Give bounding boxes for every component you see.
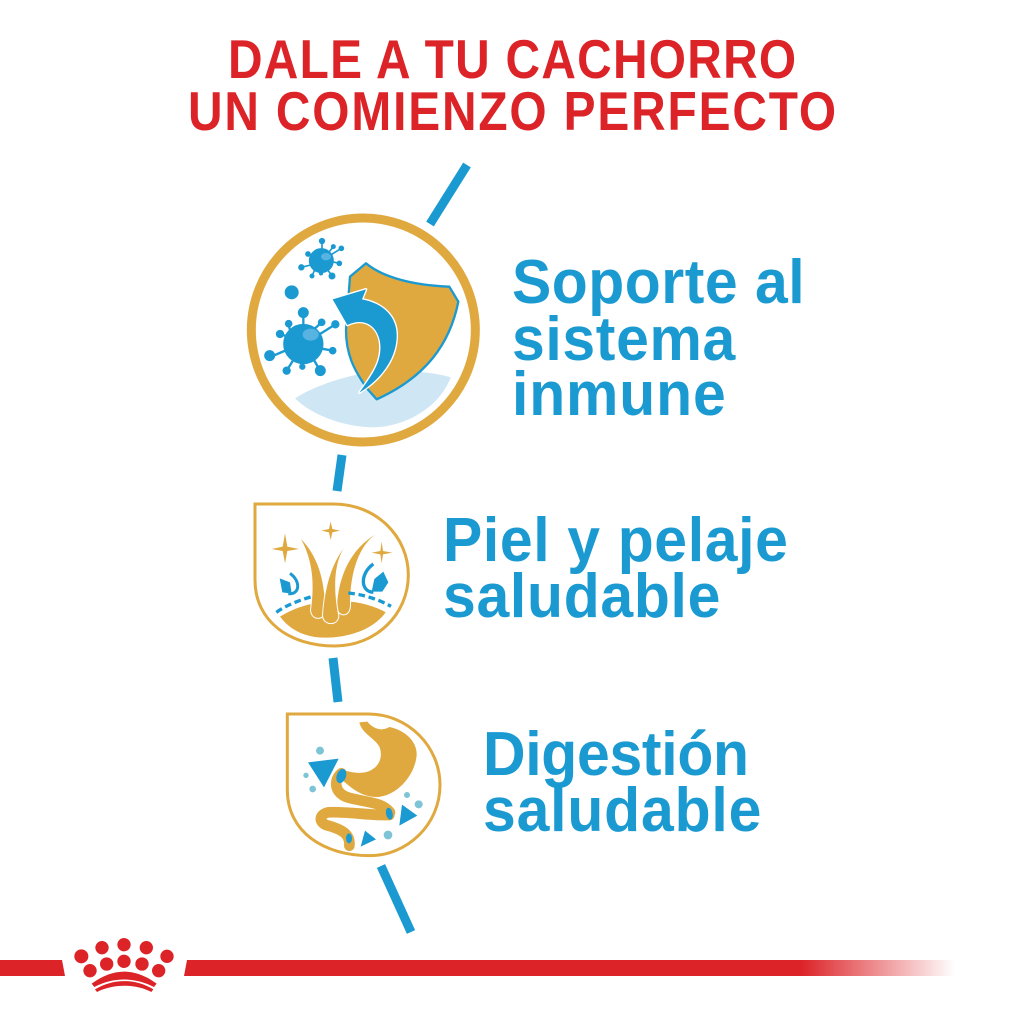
heading: skin and coat: saludable bbox=[443, 561, 720, 630]
timeline line segments bbox=[333, 165, 467, 932]
heading: immune support: Soporte al bbox=[512, 247, 805, 316]
icon: royal crown logo bbox=[74, 938, 174, 992]
heading: skin and coat bbox=[443, 505, 788, 630]
icon: digestion bbox=[287, 714, 440, 856]
virus small bbox=[299, 239, 343, 279]
heading: digestion: Digestión bbox=[483, 719, 749, 788]
title: DALE A TU CACHORRO bbox=[228, 28, 796, 90]
title bbox=[188, 28, 836, 142]
icon: skin and coat bbox=[255, 504, 408, 646]
heading: immune support: inmune bbox=[512, 359, 726, 428]
footer red bar bbox=[0, 960, 955, 976]
virus large bbox=[265, 308, 338, 375]
heading: skin and coat: Piel y pelaje bbox=[443, 505, 788, 574]
heading: immune support bbox=[512, 247, 805, 428]
icon: immune shield bbox=[251, 218, 475, 442]
title: UN COMIENZO PERFECTO bbox=[188, 80, 836, 142]
heading: immune support: sistema bbox=[512, 304, 736, 373]
heading: digestion: saludable bbox=[483, 775, 761, 844]
heading: digestion bbox=[483, 719, 761, 844]
